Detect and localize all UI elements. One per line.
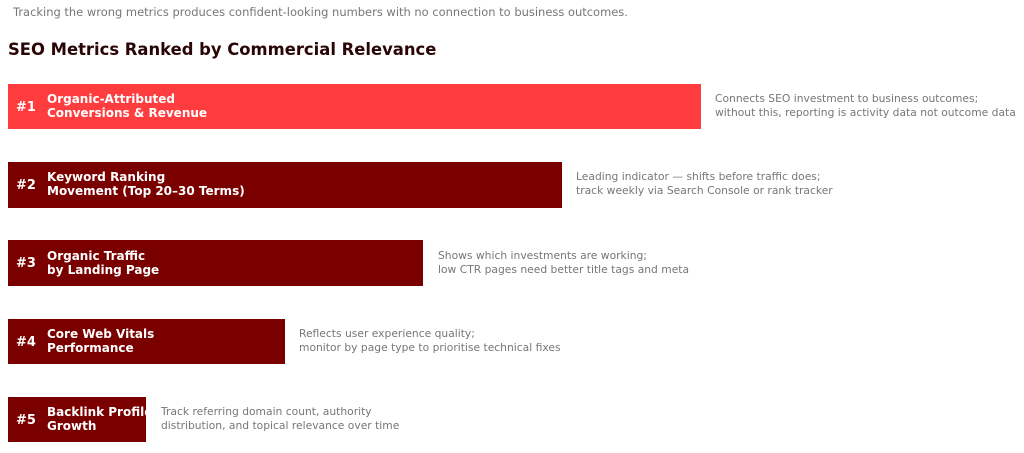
note: rank 4: monitor by page type to prioritise technical fixes	[299, 341, 561, 354]
note: rank 4: Reflects user experience quality;	[299, 327, 475, 340]
note: rank 3: low CTR pages need better title tags and meta	[438, 263, 689, 276]
bar: rank 2: #2	[16, 178, 36, 193]
bar: rank 5: Growth	[47, 419, 96, 433]
row: rank 5	[8, 397, 399, 442]
note: rank 1: Connects SEO investment to business outcomes;	[715, 92, 978, 105]
bar: rank 4: Core Web Vitals	[47, 327, 154, 341]
bar: rank 4	[8, 319, 285, 364]
bar: rank 1: Conversions & Revenue	[47, 106, 207, 120]
bar: rank 2	[8, 162, 562, 208]
note: rank 5: Track referring domain count, authority	[161, 405, 372, 418]
note: rank 2: track weekly via Search Console or rank tracker	[576, 184, 833, 197]
row: rank 3	[8, 240, 689, 286]
bar: rank 1: #1	[16, 100, 36, 115]
bar: rank 3: by Landing Page	[47, 263, 159, 277]
note: rank 1: without this, reporting is activity data not outcome data	[715, 106, 1016, 119]
note: rank 5: distribution, and topical relevance over time	[161, 419, 399, 432]
bar: rank 3	[8, 240, 423, 286]
note: rank 2: Leading indicator — shifts before traffic does;	[576, 170, 820, 183]
bar: rank 2: Movement (Top 20–30 Terms)	[47, 184, 245, 198]
row: rank 4	[8, 319, 561, 364]
note: rank 4	[299, 327, 561, 354]
note: rank 5	[160, 405, 399, 432]
bar: rank 1	[8, 84, 701, 129]
title: SEO Metrics Ranked by Commercial Relevance	[8, 40, 436, 59]
note: rank 3: Shows which investments are working;	[438, 249, 647, 262]
bar: rank 5	[8, 397, 146, 442]
bar: rank 3: Organic Traffic	[47, 249, 145, 263]
bar: rank 4: Performance	[47, 341, 134, 355]
bar: rank 4: #4	[16, 335, 36, 350]
subtitle text: Tracking the wrong metrics produces confident-looking numbers with no connection to business outcomes.	[13, 5, 628, 19]
bar: rank 2: Keyword Ranking	[47, 170, 165, 184]
row: rank 2	[8, 162, 833, 208]
note: rank 3	[438, 249, 689, 276]
bar: rank 5: #5	[16, 413, 36, 428]
bar: rank 3: #3	[16, 256, 36, 271]
note: rank 1	[715, 92, 1016, 119]
bar: rank 1: Organic-Attributed	[47, 92, 175, 106]
row: rank 1	[8, 84, 1016, 129]
note: rank 2	[576, 170, 833, 197]
